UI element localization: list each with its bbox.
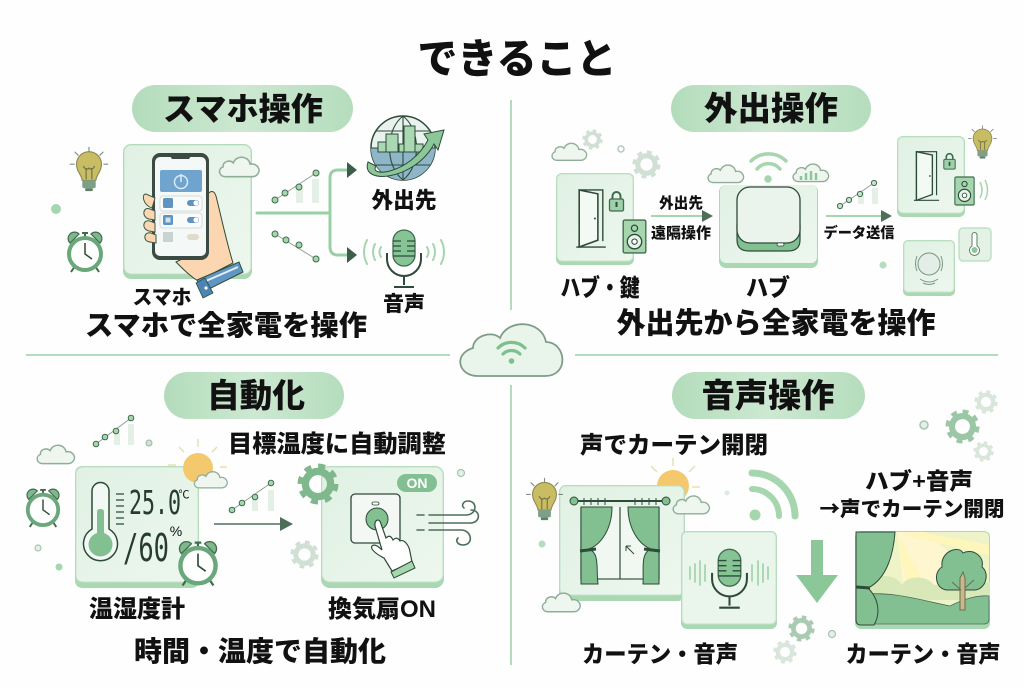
card: opened curtain landscape (855, 531, 990, 629)
icon: globe with city (367, 116, 444, 180)
icon: alarm clock (27, 489, 59, 527)
caption: operate from outside: 外出先から全家電を操作 (616, 307, 936, 340)
label: remote destination: 外出先 (372, 188, 436, 213)
icon: decorations (552, 131, 658, 176)
panel: voice control (526, 372, 1004, 667)
card: phone background (123, 144, 252, 279)
icon: hand holding phone (143, 153, 243, 298)
icon: cloud (194, 472, 227, 488)
caption: automate by time and temperature: 時間・温度で自動化 (134, 636, 386, 667)
icon: dots (35, 470, 464, 570)
card: hub device (719, 185, 818, 268)
icon: light bulb (70, 147, 108, 191)
card: fan switch: ON (406, 475, 428, 491)
heading: automation (164, 372, 344, 419)
card: door, lock and speaker devices (897, 136, 988, 217)
icon: gears (775, 617, 836, 662)
label: target temperature: 目標温度に自動調整 (228, 431, 446, 458)
icon: microphone with sound waves (364, 230, 444, 287)
title: できること (418, 36, 616, 82)
card: motion sensor (903, 240, 955, 296)
icon: light bulb (968, 125, 997, 159)
icon: cloud (37, 445, 74, 464)
icon: dot (538, 540, 546, 548)
arrow: branching connector (257, 162, 357, 263)
heading: voice control: 音声操作 (702, 377, 834, 414)
icon: alarm clock (68, 232, 102, 272)
arrow: send data (826, 210, 892, 222)
label: hub: ハブ (746, 274, 790, 302)
card: thermo-hygrometer: ℃ (178, 489, 190, 501)
icon: dot (51, 204, 61, 214)
card: thermo-hygrometer: /60 (123, 526, 169, 570)
icon: cloud (220, 157, 259, 177)
label: open curtains by voice: 声でカーテン開閉 (580, 432, 768, 458)
label: smartphone: スマホ (132, 286, 192, 309)
icon: signal rising (272, 170, 319, 203)
heading: remote control: 外出操作 (704, 90, 838, 127)
icon: signal falling (272, 231, 319, 262)
label: fan on: 換気扇ON (328, 595, 436, 623)
label: remote destination: 外出先 (659, 194, 703, 212)
panel: smartphone control (51, 85, 444, 341)
label: curtain and voice: カーテン・音声 (846, 641, 1000, 667)
card: curtain window (559, 485, 685, 601)
icon: dot (880, 262, 886, 268)
icon: cloud with bars (793, 164, 829, 182)
card: fan switch (321, 466, 444, 588)
icon: gear (301, 467, 335, 501)
label: thermo-hygrometer: 温湿度計 (89, 596, 185, 623)
label: hub plus voice: ハブ+音声 (865, 468, 973, 494)
icon: signal rising (229, 480, 274, 513)
icon: cloud (542, 593, 580, 612)
icon: dot (146, 440, 152, 446)
icon: signal rising (93, 415, 134, 447)
panel: remote control (552, 85, 997, 340)
card: door, lock and speaker (556, 173, 646, 265)
icon: gear light (293, 543, 316, 566)
icon: sun (168, 439, 227, 483)
icon: cloud (708, 165, 744, 183)
caption: operate all appliances: スマホで全家電を操作 (85, 310, 367, 341)
icon: cloud (673, 496, 709, 514)
heading: smartphone control (132, 85, 353, 132)
arrow: to hub (651, 210, 713, 222)
arrow: result down (796, 540, 838, 603)
card: microphone (681, 531, 777, 629)
card: thermo-hygrometer: 25.0 (129, 483, 181, 522)
label: hub and key: ハブ・鍵 (560, 274, 640, 302)
heading: automation: 自動化 (207, 377, 305, 414)
icon: wifi waves (752, 473, 795, 517)
icon: light bulb (526, 478, 563, 520)
heading: remote control (671, 85, 871, 132)
card: thermo-hygrometer: % (170, 523, 182, 539)
icon: signal rising (837, 180, 878, 209)
card: thermometer (959, 228, 991, 261)
icon: wind (417, 501, 478, 545)
icon: central wifi cloud (460, 324, 562, 376)
icon: dot (724, 490, 730, 496)
heading: smartphone control: スマホ操作 (163, 91, 323, 127)
icon: sun (651, 458, 700, 502)
label: open curtains by voice: →声でカーテン開閉 (820, 492, 1004, 522)
arrow: to fan switch (214, 517, 293, 531)
heading: voice control (672, 372, 865, 419)
label: send data: データ送信 (824, 224, 895, 242)
icon: wifi (751, 154, 786, 181)
label: curtain and voice: カーテン・音声 (582, 641, 738, 667)
label: voice: 音声 (383, 293, 425, 316)
icon: gears cluster (920, 392, 996, 460)
card: thermo-hygrometer (75, 466, 199, 588)
icon: alarm clock large (179, 542, 217, 586)
panel: automation (27, 372, 478, 667)
label: remote operation: 遠隔操作 (651, 224, 711, 242)
